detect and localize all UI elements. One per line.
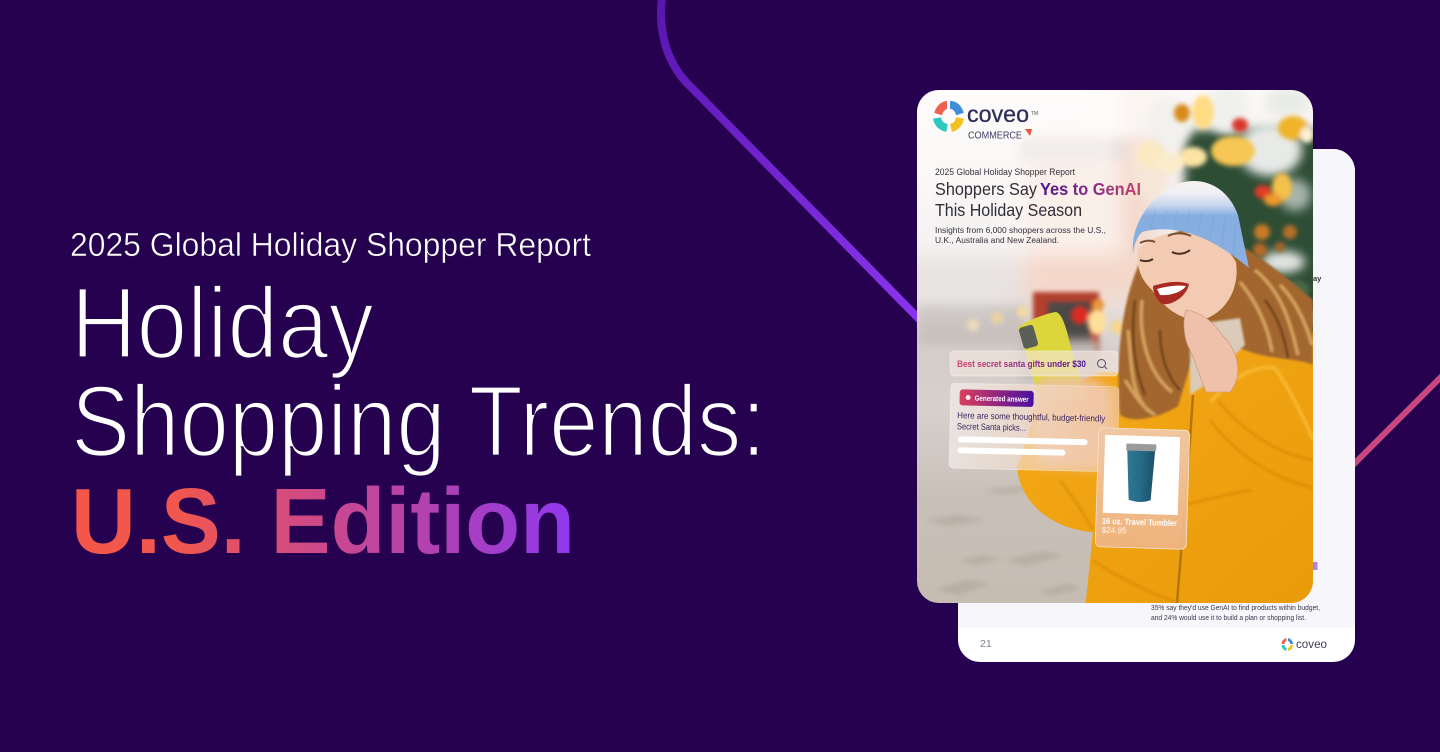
product card: [1095, 428, 1190, 549]
footer coveo logo: coveo: [1296, 637, 1327, 651]
cover photo: hair: [1118, 230, 1313, 419]
front report cover: [907, 80, 1325, 610]
page number: 21: [980, 638, 992, 650]
cover subtitle: [936, 227, 1106, 244]
generated answer badge: [959, 389, 1034, 407]
decorative diagonal line: purple segment: [661, 0, 925, 325]
headline line 1: Holiday: [71, 268, 374, 380]
commerce label: COMMERCE: [968, 130, 1022, 142]
smile: [1153, 282, 1189, 304]
cover eyebrow: 2025 Global Holiday Shopper Report: [935, 167, 1075, 178]
answer placeholder lines: [958, 436, 1088, 445]
search bar: [950, 351, 1118, 376]
answer text: Secret Santa picks...: [957, 421, 1026, 433]
answer text: Here are some thoughtful, budget-friendly: [957, 410, 1106, 424]
product label: $24.95: [1102, 525, 1127, 536]
cover photo: knit hat: [1133, 181, 1249, 268]
tumbler icon: [1125, 443, 1156, 502]
eyebrow heading: 2025 Global Holiday Shopper Report: [70, 226, 591, 263]
eyes and brows: [1140, 233, 1191, 243]
coveo commerce logo: [937, 101, 1038, 142]
cover photo: street background: [917, 90, 1313, 603]
cover photo: phone: [1018, 312, 1088, 400]
page body text: [1151, 603, 1320, 622]
page body text: 35% say they'd use GenAI to find products within budget,: [1151, 603, 1320, 612]
cover photo: scarf collar: [1190, 318, 1245, 395]
search icon: [1098, 360, 1107, 369]
title block: [70, 226, 766, 573]
product image: [1103, 435, 1180, 515]
cover title: Yes to GenAI: [1040, 179, 1141, 199]
cover photo: holding hand blur: [1032, 375, 1113, 470]
clipped text fragment: ay: [1313, 274, 1322, 283]
chart bar fragment: [1313, 562, 1318, 570]
cover photo: tree with bokeh lights: [1134, 90, 1313, 349]
logo wordmark: coveo: [967, 101, 1029, 127]
cover photo: hand: [1184, 310, 1238, 392]
decorative diagonal line: pink segment: [1350, 374, 1440, 468]
cover photo: street lights bokeh: [967, 299, 1125, 335]
footer coveo logo: [1281, 637, 1327, 651]
cover title: [935, 179, 1141, 220]
headline highlight: U.S. Edition: [71, 469, 575, 573]
product label: 16 oz. Travel Tumbler: [1102, 516, 1178, 528]
white veil behind cover text: [907, 80, 1122, 255]
cover photo: jacket: [1017, 330, 1320, 610]
cover subtitle: U.K., Australia and New Zealand.: [935, 235, 1059, 245]
logo mark: [937, 105, 960, 128]
logo accent: [1025, 129, 1032, 136]
cover title: This Holiday Season: [935, 200, 1082, 220]
page body text: and 24% would use it to build a plan or shopping list.: [1151, 613, 1306, 622]
cover title: Shoppers Say: [935, 179, 1037, 199]
coveo commerce logo: TM: [1031, 111, 1038, 117]
back report page: [958, 149, 1355, 662]
generated answer badge: Generated answer: [975, 394, 1029, 404]
product label: [1102, 518, 1177, 534]
headline line 2: Shopping Trends:: [71, 366, 766, 478]
generated answer panel: [949, 383, 1119, 472]
search bar: Best secret santa gifts under $30: [957, 359, 1086, 369]
answer text: [957, 412, 1106, 432]
cover subtitle: Insights from 6,000 shoppers across the U.S.,: [935, 225, 1106, 235]
cover photo: face: [1138, 233, 1237, 320]
